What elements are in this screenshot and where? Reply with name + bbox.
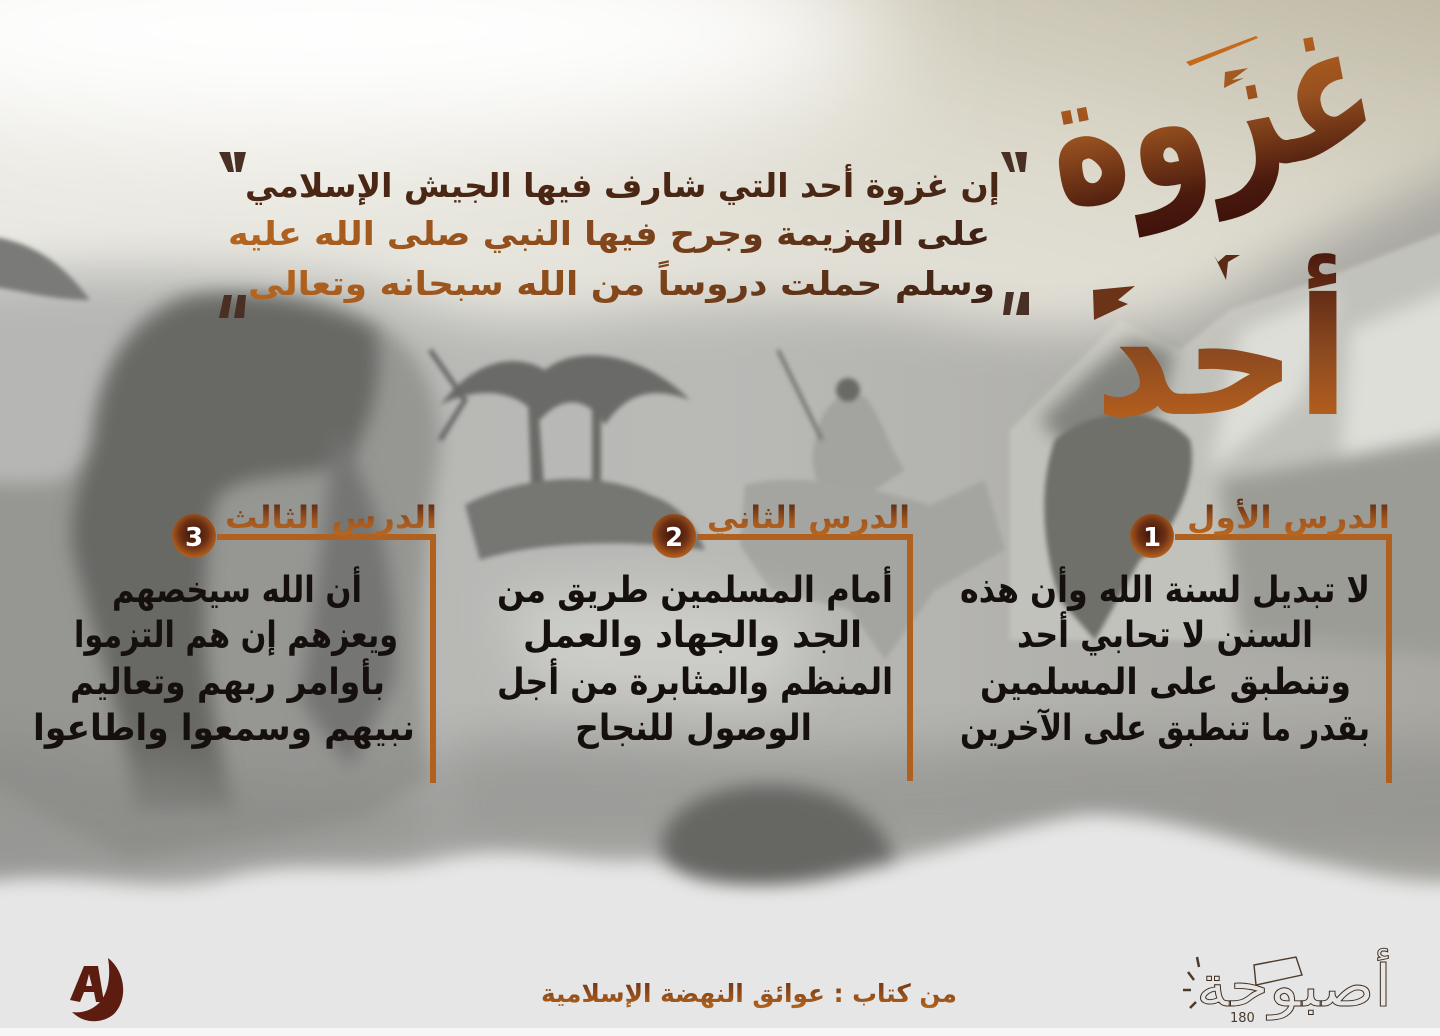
quote line 3: وسلم حملت دروساً من الله سبحانه وتعالى — [248, 260, 995, 304]
lesson 1 body: وتنطبق على المسلمين — [980, 662, 1351, 703]
quote line 2: على الهزيمة وجرح فيها النبي صلى الله عليه — [228, 214, 990, 254]
logo: left emblem — [70, 958, 123, 1021]
quote line 1: إن غزوة أحد التي شارف فيها الجيش الإسلامي — [245, 164, 1000, 206]
lesson 2 body: المنظم والمثابرة من أجل — [497, 658, 893, 703]
lesson 3 body — [33, 566, 415, 749]
lesson 2 body: أمام المسلمين طريق من — [497, 566, 893, 611]
lesson 2 body: الوصول للنجاح — [575, 708, 812, 749]
lesson 3 number: 3 — [185, 523, 203, 553]
lesson 1 body: السنن لا تحابي أحد — [1017, 611, 1313, 656]
lesson 1 body — [960, 566, 1370, 749]
quote text — [219, 152, 1029, 318]
quote marks — [219, 152, 1029, 318]
lesson 3 heading: الدرس الثالث — [225, 500, 437, 536]
lesson 3 frame — [217, 537, 433, 783]
background: palm trees — [440, 355, 705, 560]
title word 2: أحد — [1094, 252, 1350, 452]
lesson 3 body: أن الله سيخصهم — [112, 566, 362, 611]
logo: Osbouha 180: 180 — [1230, 1011, 1255, 1026]
lesson 2 heading: الدرس الثاني — [707, 500, 910, 536]
lesson 1 panel — [960, 498, 1390, 783]
background: central rider — [740, 350, 1192, 660]
background: mountain — [1010, 210, 1440, 660]
lesson 3 body: بأوامر ربهم وتعاليم — [70, 658, 385, 703]
lesson 1 number — [1130, 514, 1174, 558]
lesson 3 panel — [33, 500, 437, 783]
lesson 3 body: نبيهم وسمعوا واطاعوا — [33, 708, 415, 749]
lesson 2 number — [652, 514, 696, 558]
background: top fog — [0, 0, 1440, 328]
background: ground mist — [0, 590, 1440, 900]
lesson 1 body: لا تبديل لسنة الله وأن هذه — [960, 566, 1370, 611]
lesson 1 frame — [1175, 537, 1389, 783]
logo: Osbouha 180: أصبوحة — [1196, 948, 1392, 1021]
lesson 3 body: ويعزهم إن هم التزموا — [74, 615, 398, 656]
lesson 1 number: 1 — [1143, 523, 1161, 553]
title: غزوة أحد — [1028, 0, 1393, 452]
lesson 2 body — [497, 566, 893, 749]
background: left dark horse and rider — [0, 235, 465, 860]
background: fallen figure — [662, 785, 897, 895]
lesson 2 number: 2 — [665, 523, 683, 553]
lesson 2 panel — [497, 500, 910, 781]
lesson 1 heading: الدرس الأول — [1187, 498, 1390, 536]
background: lower clouds — [0, 814, 1440, 1036]
lesson 2 body: الجد والجهاد والعمل — [523, 615, 862, 656]
lesson 3 number — [172, 514, 216, 558]
source line: من كتاب : عوائق النهضة الإسلامية — [541, 979, 957, 1009]
lesson 1 body: بقدر ما تنطبق على الآخرين — [960, 707, 1370, 749]
lesson 2 frame — [697, 537, 910, 781]
